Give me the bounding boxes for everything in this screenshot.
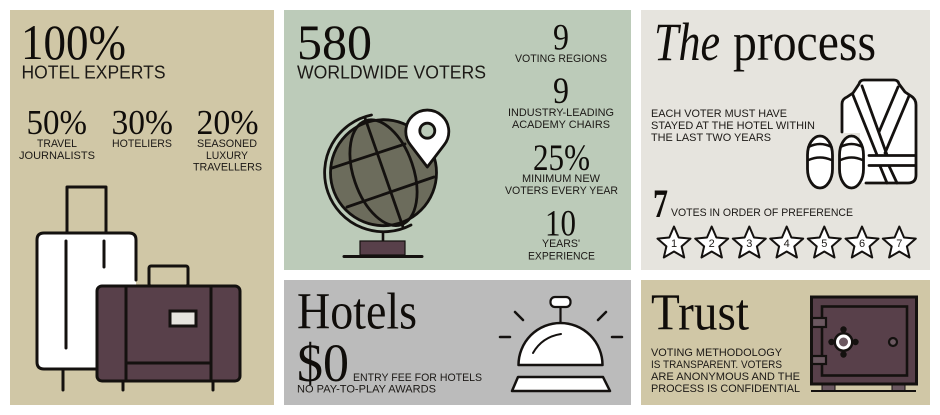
- stat: 20% seasoned luxury travellers: [193, 103, 262, 174]
- stat: 10 years experience: 10: [545, 204, 576, 244]
- heading: trust: Trust: [651, 284, 750, 342]
- stat: 9 academy chairs: INDUSTRY-LEADING: [508, 107, 614, 119]
- stat: 9 academy chairs: [508, 71, 614, 131]
- stat: $0 entry fee: ENTRY FEE FOR HOTELS: [353, 372, 482, 384]
- stat: $0 entry fee: NO PAY-TO-PLAY AWARDS: [297, 384, 436, 396]
- panel: trust: [641, 280, 930, 405]
- icon: seven numbered stars: 3: [746, 238, 752, 250]
- stat: 20% seasoned luxury travellers: TRAVELLERS: [193, 162, 262, 174]
- stat: 9 voting regions: VOTING REGIONS: [515, 53, 607, 65]
- text: stay requirement: THE LAST TWO YEARS: [651, 132, 771, 144]
- stat: 9 academy chairs: ACADEMY CHAIRS: [512, 119, 610, 131]
- icon: bathrobe and slippers: [808, 80, 916, 188]
- stat: $0 entry fee: $0: [297, 333, 349, 393]
- icon: seven numbered stars: 6: [859, 238, 865, 250]
- text: methodology: [651, 347, 800, 395]
- stat: 25% new voters: [505, 138, 618, 197]
- panel: the process: [641, 10, 930, 270]
- heading: the process: process: [733, 12, 876, 72]
- stat: 9 voting regions: [515, 18, 607, 65]
- icon: luggage: [37, 187, 240, 390]
- heading: the process: [654, 12, 876, 72]
- stat: 25% new voters: 25%: [533, 138, 590, 179]
- stat: 9 academy chairs: 9: [553, 71, 569, 112]
- panel: worldwide voters: [284, 10, 631, 270]
- stat: 30% hoteliers: HOTELIERS: [112, 138, 172, 150]
- heading: hotels: Hotels: [297, 284, 417, 340]
- icon: seven numbered stars: 7: [896, 238, 902, 250]
- heading: the process: The: [654, 12, 720, 72]
- icon: reception bell: [500, 297, 622, 391]
- stat: 25% new voters: MINIMUM NEW: [522, 173, 601, 185]
- text: methodology: ARE ANONYMOUS AND THE: [651, 371, 800, 383]
- stat: 10 years experience: YEARS': [542, 238, 580, 250]
- stat: 10 years experience: EXPERIENCE: [528, 250, 595, 262]
- panel: hotels: [284, 280, 631, 405]
- text: methodology: IS TRANSPARENT. VOTERS: [651, 359, 782, 371]
- icon: seven numbered stars: 1: [671, 238, 677, 250]
- heading: 100% hotel experts: HOTEL EXPERTS: [22, 62, 166, 82]
- stat: 50% travel journalists: JOURNALISTS: [19, 150, 95, 162]
- stat: 9 voting regions: 9: [553, 18, 569, 58]
- icon: seven numbered stars: [658, 226, 916, 258]
- stat: $0 entry fee: [297, 333, 482, 396]
- icon: safe: [811, 297, 916, 391]
- stat: 7 votes: 7: [653, 181, 668, 226]
- stat: 50% travel journalists: TRAVEL: [37, 138, 77, 150]
- heading: 580 worldwide voters: WORLDWIDE VOTERS: [297, 62, 486, 82]
- stat: 50% travel journalists: 50%: [26, 103, 87, 142]
- icon: globe with pin: [325, 110, 449, 256]
- icon: seven numbered stars: 4: [784, 238, 790, 250]
- stat: 20% seasoned luxury travellers: SEASONED: [197, 138, 257, 150]
- stat: 7 votes: [653, 181, 853, 226]
- stat: 30% hoteliers: 30%: [112, 103, 173, 142]
- stat: 20% seasoned luxury travellers: 20%: [196, 103, 258, 142]
- stat: 50% travel journalists: [19, 103, 95, 162]
- text: methodology: PROCESS IS CONFIDENTIAL: [651, 383, 800, 395]
- heading: 580 worldwide voters: 580: [297, 14, 372, 70]
- icon: seven numbered stars: 5: [821, 238, 827, 250]
- stat: 20% seasoned luxury travellers: LUXURY: [206, 150, 249, 162]
- panel: hotel experts: [10, 10, 274, 405]
- heading: 100% hotel experts: [21, 14, 166, 82]
- icon: seven numbered stars: 2: [709, 238, 715, 250]
- heading: 580 worldwide voters: [297, 14, 486, 82]
- heading: 100% hotel experts: 100%: [21, 14, 126, 70]
- stat: 10 years experience: [528, 204, 595, 262]
- text: stay requirement: EACH VOTER MUST HAVE: [651, 108, 787, 120]
- text: stay requirement: STAYED AT THE HOTEL WITHIN: [651, 120, 815, 132]
- stat: 25% new voters: VOTERS EVERY YEAR: [505, 185, 618, 197]
- text: stay requirement: [651, 108, 815, 144]
- stat: 7 votes: VOTES IN ORDER OF PREFERENCE: [671, 207, 853, 219]
- text: methodology: VOTING METHODOLOGY: [651, 347, 783, 359]
